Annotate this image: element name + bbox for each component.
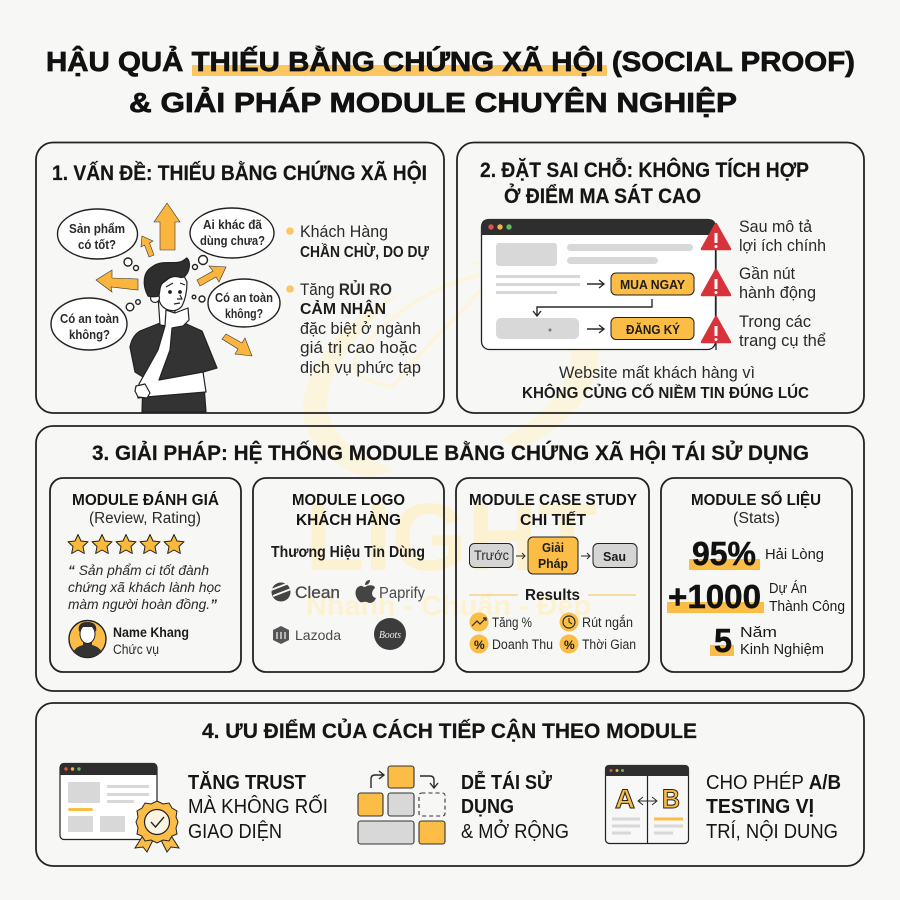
card: stats: (Stats) [733, 510, 780, 527]
watermark logo: LIGHT [305, 484, 597, 591]
bullets: đặc biệt ở ngành [300, 320, 421, 338]
benefit 2 text [461, 770, 569, 843]
benefit 2 text: DỄ TÁI SỬ [461, 770, 552, 794]
results heading: Results [525, 587, 580, 604]
thought bubbles: Sản phẩm [69, 222, 125, 236]
placement labels: Sau mô tả [739, 218, 813, 236]
stat: 5 years: 5 [714, 622, 732, 659]
benefit 2 text: DỤNG [461, 796, 514, 818]
title: HẬU QUẢ THIẾU BẰNG CHỨNG XÃ HỘI (SOCIAL PROOF) [46, 45, 855, 77]
bullets: CẢM NHẬN [300, 299, 386, 318]
thought bubbles: Ai khác đã [203, 218, 262, 232]
button: mua ngay [611, 273, 694, 295]
benefit 3 text: TRÍ, NỘI DUNG [706, 820, 838, 843]
stat: 5 years [710, 622, 824, 659]
results icons [470, 612, 578, 654]
thought bubbles: không? [69, 328, 110, 342]
card: stats [661, 478, 852, 672]
thought bubbles: dùng chưa? [200, 234, 265, 248]
quote [68, 563, 221, 612]
results labels: Rút ngắn [582, 615, 633, 630]
benefit 1 text: TĂNG TRUST [188, 771, 306, 794]
bullets [286, 223, 430, 377]
bullets: CHẦN CHỪ, DO DỰ [300, 242, 430, 261]
placement labels: Gần nút [739, 265, 795, 283]
flow: before solution after: Pháp [538, 556, 568, 571]
icon: browser with badge [60, 763, 179, 852]
browser mockup [481, 219, 716, 350]
title: & GIẢI PHÁP MODULE CHUYÊN NGHIỆP [129, 86, 737, 118]
watermark logo [303, 262, 599, 621]
avatar [69, 620, 106, 658]
card: review: Chức vụ [113, 642, 159, 657]
flow: before solution after: Trước [474, 548, 509, 563]
card: logo: KHÁCH HÀNG [296, 510, 401, 529]
title [46, 45, 855, 118]
placement labels: trang cụ thể [739, 332, 826, 350]
flow: before solution after: Giải [542, 540, 564, 555]
logo: lazoda: Lazoda [295, 627, 341, 643]
placement labels: lợi ích chính [739, 237, 826, 255]
quote: “ Sản phẩm ci tốt đành [68, 563, 209, 578]
button: dang ky [611, 318, 694, 340]
bullets: giá trị cao hoặc [300, 339, 417, 357]
benefit 2 text: & MỞ RỘNG [461, 819, 569, 843]
icon: thinking person [130, 258, 217, 412]
heading: panel 1: 1. VẤN ĐỀ: THIẾU BẰNG CHỨNG XÃ HỘI [52, 161, 427, 185]
panel: 4 benefits [36, 703, 864, 866]
conclusion text: KHÔNG CỦNG CỐ NIỀM TIN ĐÚNG LÚC [522, 382, 809, 402]
conclusion text [522, 364, 809, 402]
results labels: Doanh Thu [492, 637, 553, 652]
card: logo: Thương Hiệu Tin Dùng [271, 544, 425, 561]
heading: panel 3: 3. GIẢI PHÁP: HỆ THỐNG MODULE BẰNG CHỨNG XÃ HỘI TÁI SỬ DỤNG [92, 441, 809, 465]
benefit 1 text: GIAO DIỆN [188, 820, 282, 843]
thought bubbles: Có an toàn [215, 291, 273, 305]
stat: +1000: +1000 [668, 578, 761, 615]
heading: panel 2: Ở ĐIỂM MA SÁT CAO [504, 184, 701, 208]
placement labels: Trong các [739, 313, 811, 331]
card: case study [456, 478, 649, 672]
flow: before solution after: Sau [603, 549, 626, 564]
stars [68, 534, 184, 554]
bullets: Tăng RỦI RO [300, 280, 392, 299]
quote: màm người hoàn đồng.” [68, 597, 217, 612]
watermark logo: Nhanh - Chuẩn - Đẹp [306, 590, 591, 621]
stat: +1000: Dự Án [769, 580, 807, 597]
flow: before solution after [470, 537, 637, 574]
placement labels: hành động [739, 284, 816, 302]
heading: panel 4: 4. ƯU ĐIỂM CỦA CÁCH TIẾP CẬN THEO MODULE [202, 719, 697, 743]
card: logo [253, 478, 444, 672]
heading: panel 2: 2. ĐẶT SAI CHỖ: KHÔNG TÍCH HỢP [480, 158, 809, 182]
card: case study: CHI TIẾT [520, 510, 586, 529]
card: stats: MODULE SỐ LIỆU [691, 489, 821, 509]
icon: modular blocks [358, 766, 445, 844]
panel: 3 solution [36, 426, 864, 691]
logo: boots [374, 618, 406, 650]
stat: 5 years: Kinh Nghiệm [740, 642, 824, 658]
card: review: Name Khang [113, 625, 189, 640]
logo: paprify [356, 580, 425, 603]
benefit 3 text [706, 771, 841, 843]
card: review: (Review, Rating) [89, 510, 201, 527]
benefit 3 text: CHO PHÉP A/B [706, 771, 841, 794]
arrows around person [96, 203, 252, 356]
benefit 1 text: MÀ KHÔNG RỐI [188, 794, 328, 818]
thought bubbles [51, 208, 280, 350]
logo: lazoda [273, 626, 341, 644]
logo: clean: Clean [295, 583, 340, 602]
icon: A/B browser: A [615, 784, 635, 814]
results labels [492, 615, 636, 652]
results icons: % [564, 638, 575, 652]
panel: 1 problem [36, 142, 444, 413]
logo: boots: Boots [379, 629, 401, 641]
card: review: MODULE ĐÁNH GIÁ [72, 490, 219, 509]
quote: chứng xã khách lành học [68, 580, 221, 595]
warning icons [702, 224, 730, 350]
results icons: % [474, 638, 485, 652]
stat: 5 years: Năm [740, 625, 777, 641]
heading: panel 2 [480, 158, 809, 208]
icon: A/B browser [605, 765, 689, 844]
card: review [50, 478, 241, 672]
card: case study: MODULE CASE STUDY [469, 492, 637, 509]
benefit 3 text: TESTING VỊ [706, 796, 814, 818]
icon: A/B browser: B [662, 784, 680, 814]
benefit 1 text [188, 771, 328, 843]
results labels: Thời Gian [582, 637, 636, 652]
logo: clean [271, 582, 340, 602]
stat: +1000: Thành Công [769, 599, 845, 615]
placement labels [739, 218, 826, 350]
bullets: dịch vụ phức tạp [300, 359, 421, 377]
stat: 95%: 95% [692, 535, 756, 572]
stat: 95%: Hải Lòng [765, 547, 824, 563]
card: logo: MODULE LOGO [292, 492, 405, 509]
conclusion text: Website mất khách hàng vì [559, 364, 755, 382]
thought bubbles: có tốt? [78, 238, 116, 252]
thought bubbles: không? [225, 307, 263, 321]
button: dang ky: ĐĂNG KÝ [626, 322, 680, 337]
stat: 95% [689, 535, 824, 572]
panel: 2 wrong placement [457, 142, 864, 413]
button: mua ngay: MUA NGAY [620, 277, 685, 292]
thought bubbles: Có an toàn [60, 312, 119, 326]
bullets: Khách Hàng [300, 223, 388, 241]
results labels: Tăng % [492, 615, 532, 630]
logo: paprify: Paprify [379, 585, 425, 602]
stat: +1000 [667, 578, 845, 615]
